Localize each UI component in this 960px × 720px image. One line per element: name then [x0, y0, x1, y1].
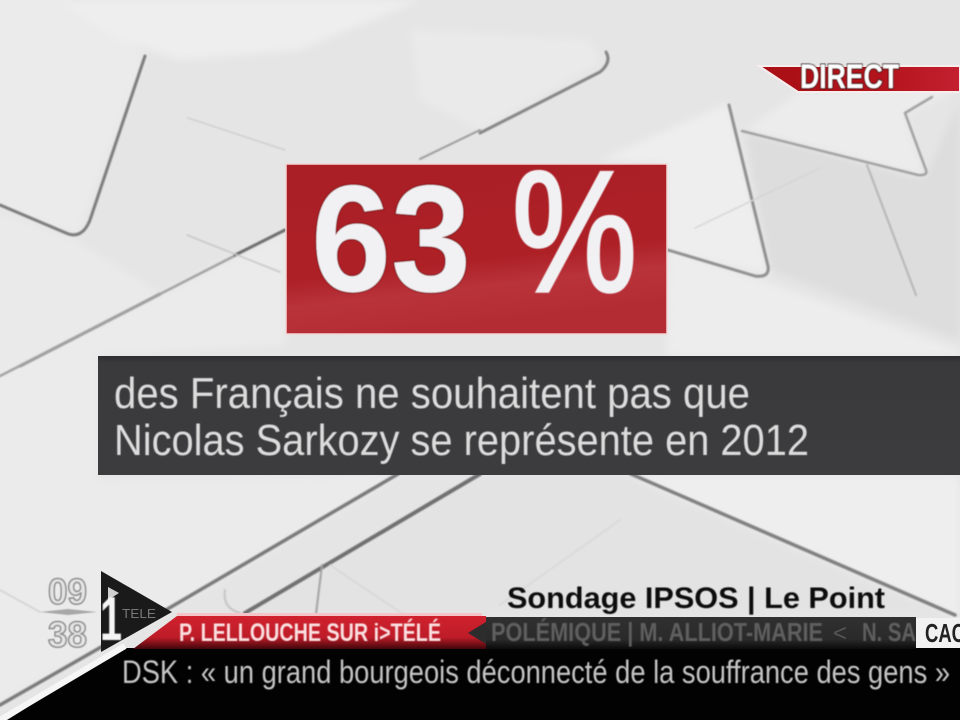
red headline strap [133, 613, 486, 649]
statement text [114, 369, 809, 465]
clock: 09 [48, 571, 87, 612]
percentage figure: 63 [311, 154, 471, 324]
percentage figure [311, 136, 637, 328]
clock [40, 571, 97, 655]
channel logo: 1 [100, 585, 122, 654]
secondary ticker: < [833, 620, 847, 647]
channel logo: TELE [122, 606, 156, 621]
statement text: des Français ne souhaitent pas que [114, 369, 750, 418]
direct badge [759, 58, 960, 96]
channel logo [100, 571, 172, 654]
red headline strap: P. LELLOUCHE SUR i>TÉLÉ [179, 618, 441, 647]
clock: 38 [48, 614, 87, 655]
secondary ticker: N. SA [862, 617, 916, 647]
dark statement panel [98, 356, 960, 475]
statement text: Nicolas Sarkozy se représente en 2012 [114, 416, 809, 465]
secondary ticker: POLÉMIQUE | M. ALLIOT-MARIE [491, 617, 823, 647]
source credit: Sondage IPSOS | Le Point [507, 582, 885, 615]
black ticker band [7, 648, 960, 720]
white diagonal edge [0, 646, 125, 720]
red percentage panel [286, 136, 667, 334]
percentage figure: % [512, 136, 637, 328]
direct badge: DIRECT [800, 58, 899, 96]
